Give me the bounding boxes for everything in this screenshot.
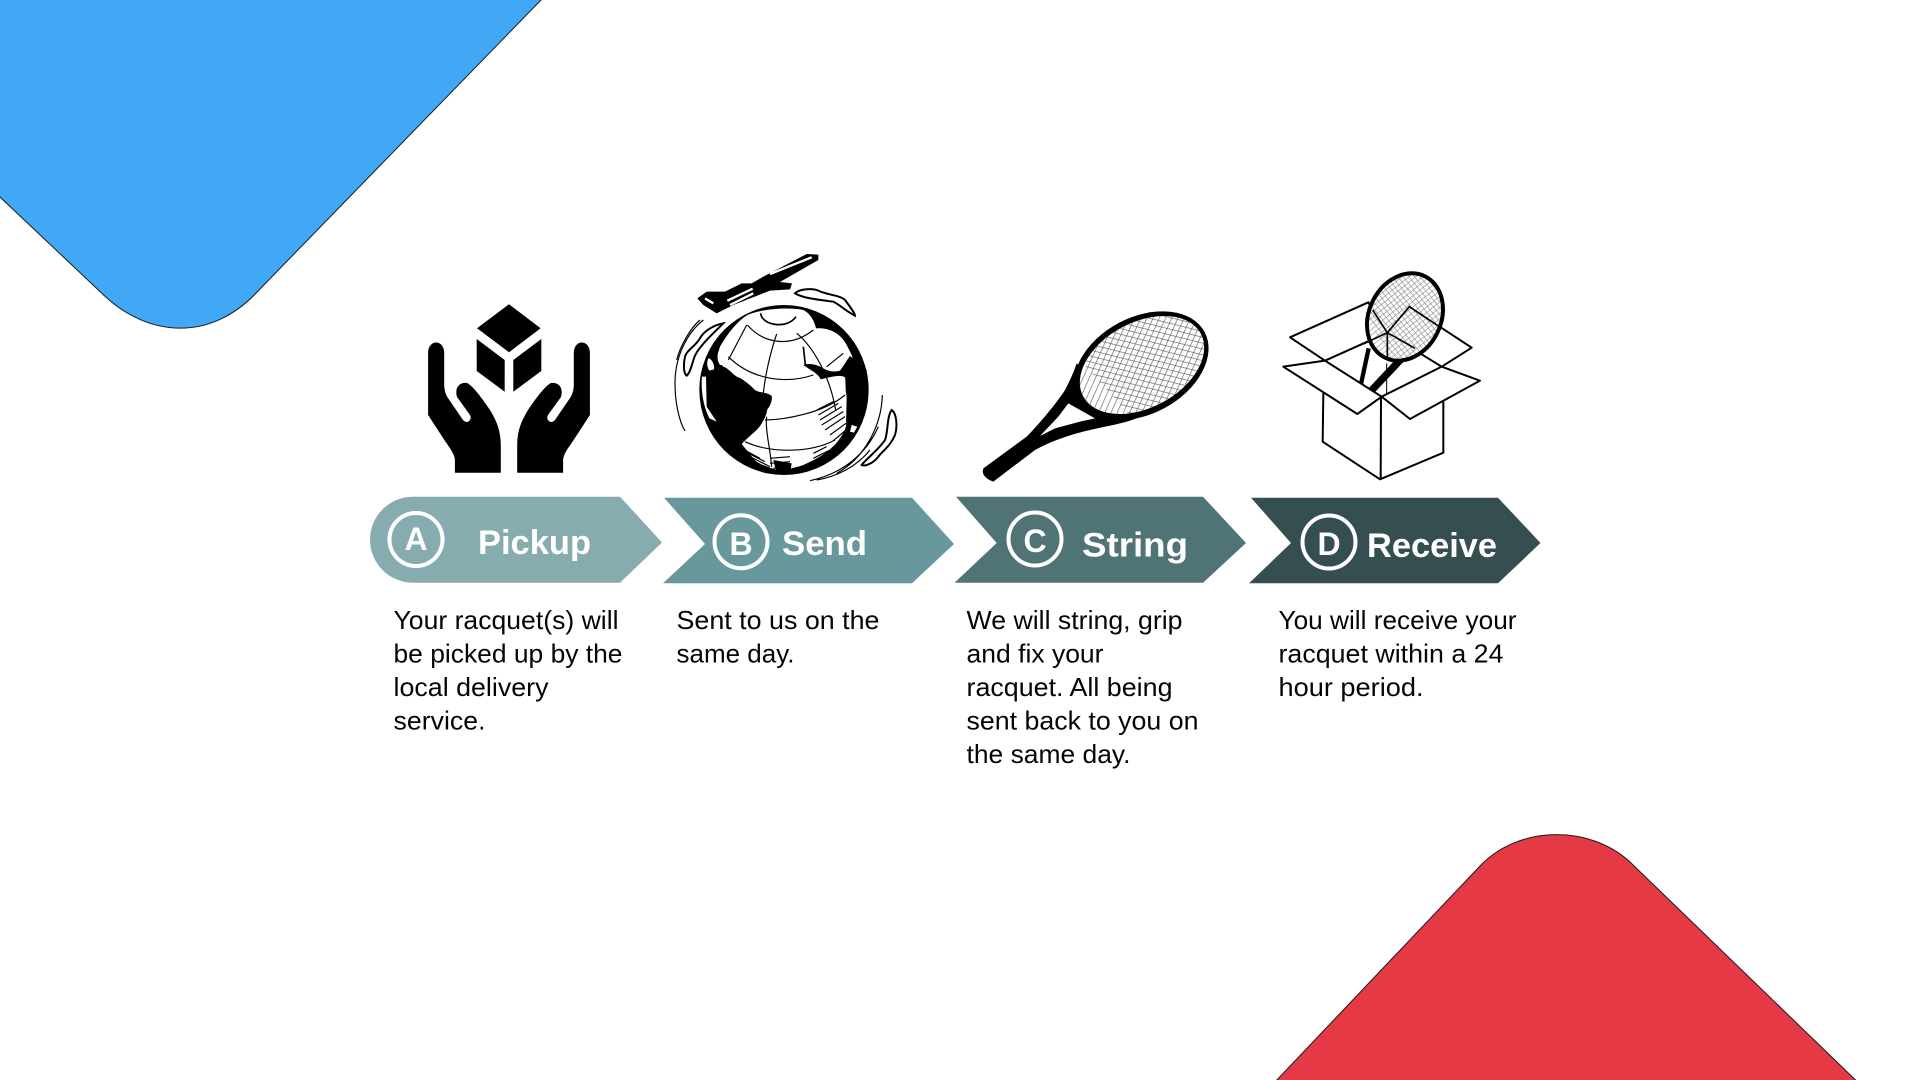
panel: step D receive — [1249, 260, 1540, 702]
arrow: send — [663, 498, 954, 583]
clouds and motion lines — [675, 289, 896, 481]
text: string description — [966, 605, 1198, 769]
text: string description: and fix your — [966, 638, 1104, 668]
text: receive description: hour period. — [1278, 672, 1424, 702]
badge: D: D — [1317, 526, 1341, 562]
arrow: receive — [1249, 498, 1540, 583]
text: send description: same day. — [676, 638, 794, 668]
panel: step A pickup — [370, 304, 662, 736]
text: receive description: racquet within a 24 — [1278, 638, 1504, 668]
racquet in box — [1359, 271, 1446, 394]
icon: tennis racquet — [982, 311, 1209, 482]
text: string description: sent back to you on — [966, 706, 1198, 736]
arrow: pickup — [370, 497, 662, 583]
badge: A — [390, 513, 442, 566]
text: string description: We will string, grip — [966, 605, 1182, 635]
icon: hands holding a box — [428, 304, 590, 473]
text: send description: Sent to us on the — [676, 605, 880, 635]
label: Pickup: Pickup — [478, 524, 591, 562]
badge: A: A — [404, 521, 428, 557]
panel: step B send — [663, 254, 954, 669]
text: string description: racquet. All being — [966, 672, 1172, 702]
text: pickup description: be picked up by the — [394, 638, 622, 668]
badge: C: C — [1023, 523, 1047, 559]
text: pickup description: local delivery — [394, 672, 548, 702]
text: string description: the same day. — [966, 739, 1130, 769]
airplane — [697, 254, 818, 313]
arrow: string — [954, 497, 1246, 583]
label: String: String — [1082, 526, 1188, 564]
decorative blue corner shape — [0, 0, 544, 328]
text: receive description: You will receive your — [1278, 605, 1517, 635]
label: Receive: Receive — [1367, 527, 1497, 565]
badge: B: B — [729, 526, 753, 562]
icon: racquet in open box — [1283, 260, 1480, 479]
text: receive description — [1278, 605, 1517, 702]
globe — [699, 305, 869, 475]
badge: B — [714, 515, 768, 568]
text: pickup description — [394, 605, 622, 736]
badge: D — [1302, 516, 1356, 568]
icon: globe with airplane — [675, 254, 896, 481]
panel: step C string — [954, 289, 1246, 769]
decorative red corner shape — [1274, 835, 1858, 1080]
label: Send: Send — [782, 525, 867, 563]
badge: C — [1008, 512, 1062, 566]
text: pickup description: service. — [394, 706, 486, 736]
text: pickup description: Your racquet(s) will — [394, 605, 618, 635]
text: send description — [676, 605, 880, 668]
